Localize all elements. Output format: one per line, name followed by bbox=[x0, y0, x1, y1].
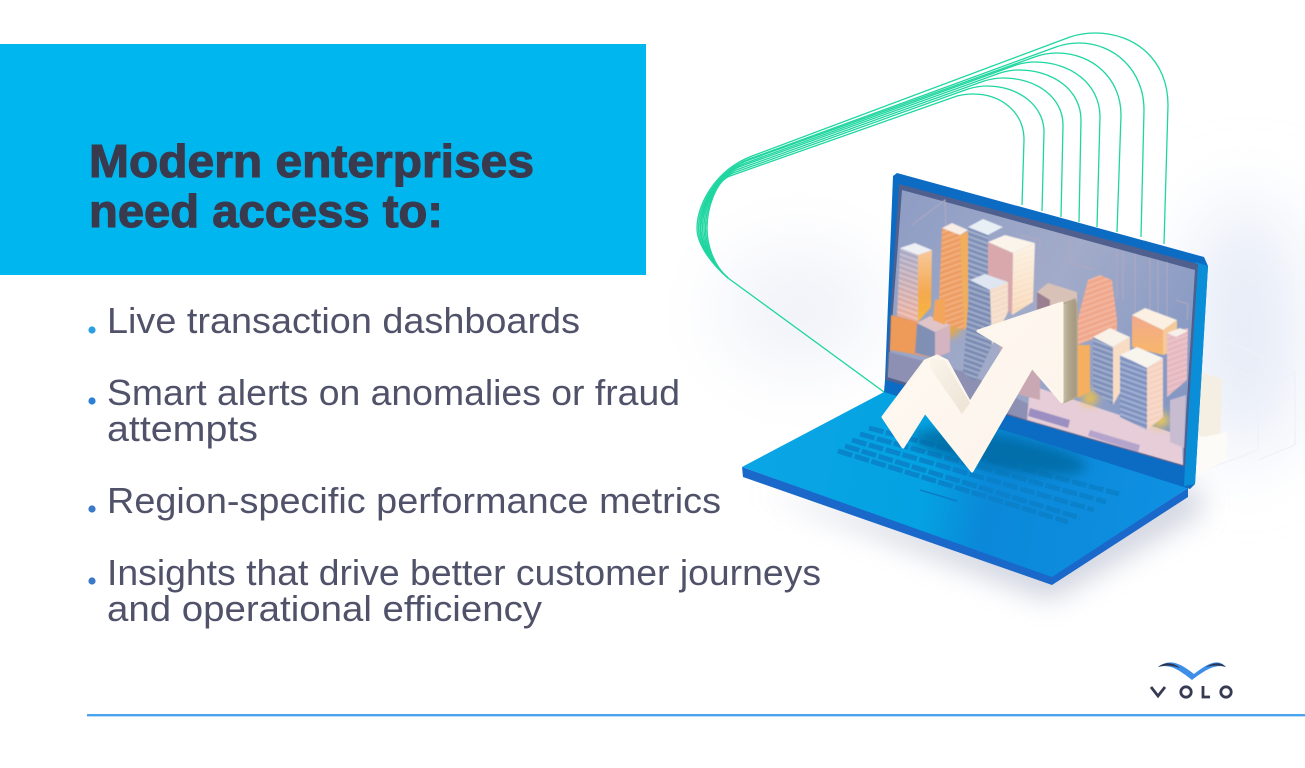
screen bbox=[886, 184, 1198, 467]
laptop bbox=[742, 173, 1227, 585]
pink tower right bbox=[1167, 328, 1188, 397]
bullet: insights: and operational efficiency bbox=[107, 588, 542, 629]
footer rule bbox=[87, 714, 1305, 716]
back building behind arrow bbox=[1037, 283, 1077, 318]
small corner tower bbox=[1170, 395, 1186, 448]
white tower behind screen bbox=[1198, 372, 1227, 476]
bullet: insights bbox=[88, 552, 821, 629]
growth arrow bbox=[883, 299, 1077, 471]
cream block bbox=[988, 235, 1035, 315]
stepped tower bbox=[1077, 275, 1117, 345]
far left tower bbox=[897, 243, 932, 322]
bullet: smart alerts bbox=[88, 372, 680, 449]
bullet: smart alerts: attempts bbox=[107, 408, 258, 449]
stripe tower middle bbox=[1093, 328, 1130, 405]
front stripe tower bbox=[1120, 347, 1163, 430]
header panel bbox=[0, 44, 646, 275]
slate tower bbox=[968, 219, 1003, 300]
hinge shadow bbox=[895, 392, 1178, 480]
low block left bbox=[915, 316, 950, 358]
bullet: region-specific: Region-specific performance metrics bbox=[107, 480, 721, 521]
arrow shadow on keyboard bbox=[910, 420, 1090, 484]
city on screen bbox=[888, 200, 1188, 465]
skyline buildings bbox=[897, 219, 1188, 448]
keyboard bbox=[838, 428, 1119, 522]
ghost wireframe right of laptop bbox=[1205, 340, 1295, 470]
orange tower bbox=[938, 223, 968, 330]
logo wordmark bbox=[1151, 686, 1231, 697]
peach block bbox=[1132, 308, 1177, 355]
title: need access to: bbox=[89, 185, 443, 237]
laptop lid frame bbox=[884, 173, 1208, 489]
laptop base bbox=[742, 392, 1188, 585]
background glow behind laptop bbox=[720, 200, 1295, 600]
bullet list bbox=[88, 300, 821, 629]
ground platforms bbox=[888, 315, 1183, 465]
bullet: live transaction dashboards: Live transaction dashboards bbox=[107, 300, 580, 341]
front slate tower bbox=[963, 274, 1008, 382]
orange block behind arrow head bbox=[1077, 345, 1090, 398]
logo bbox=[1151, 662, 1231, 698]
bullet: insights: Insights that drive better customer journeys bbox=[107, 552, 821, 593]
circuit lines bbox=[912, 200, 1188, 335]
title bbox=[89, 135, 534, 237]
title: Modern enterprises bbox=[89, 135, 534, 187]
green data lines bbox=[697, 33, 1168, 392]
logo mark: wings bbox=[1158, 662, 1226, 680]
bullet: smart alerts: Smart alerts on anomalies or fraud bbox=[107, 372, 680, 413]
warm glow bbox=[934, 306, 1170, 428]
